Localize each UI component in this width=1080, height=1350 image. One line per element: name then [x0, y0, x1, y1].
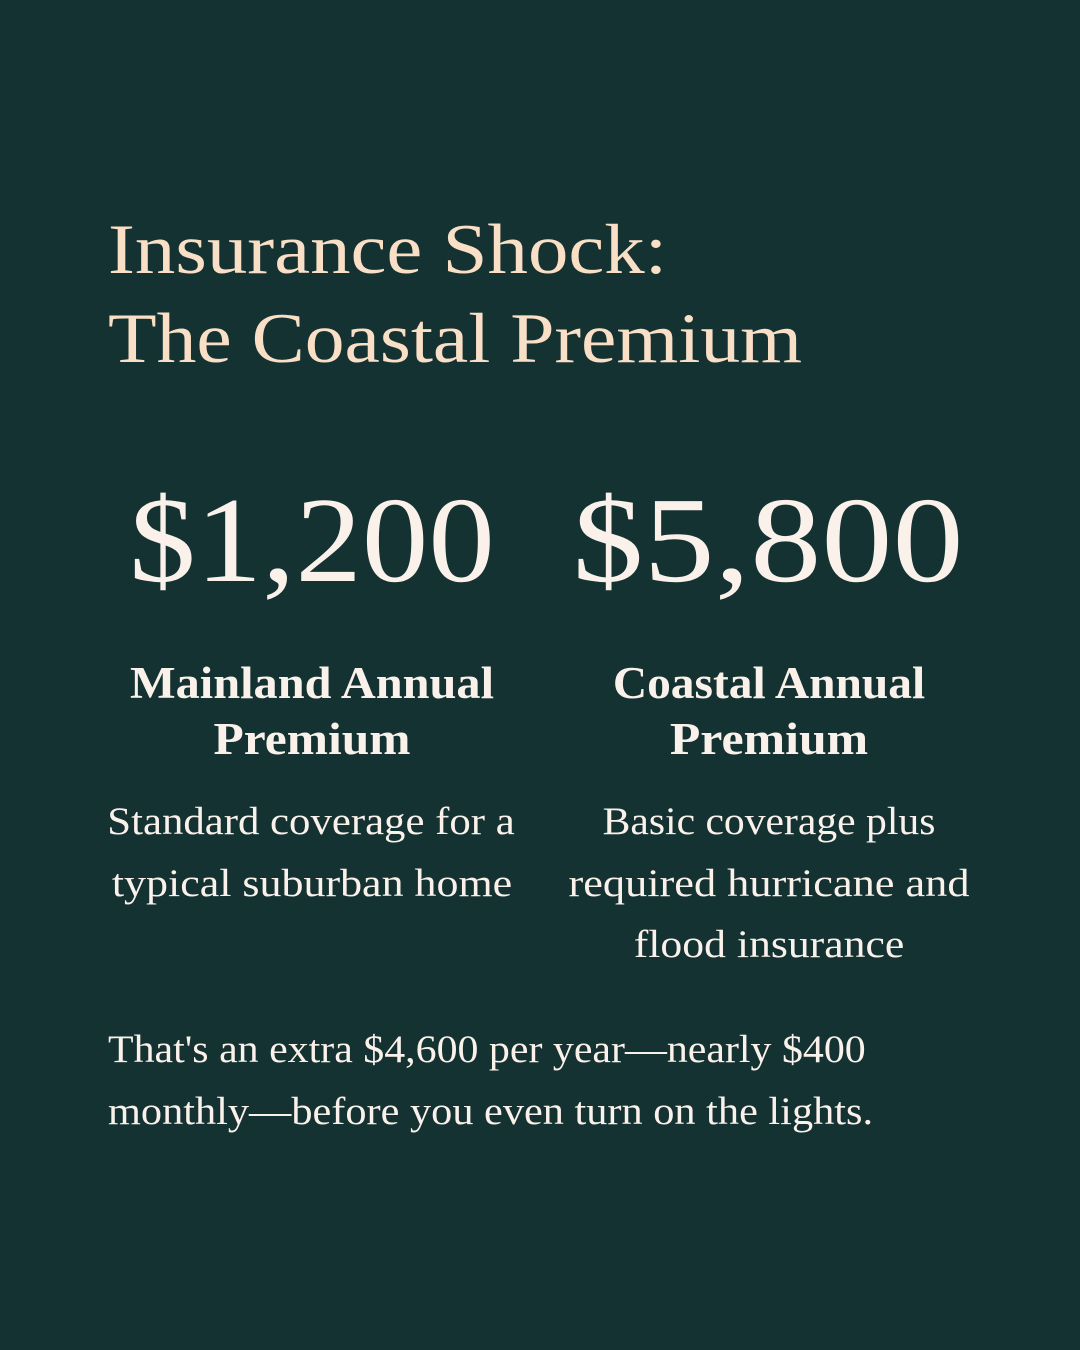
coastal amount: $5,800: [572, 473, 964, 608]
mainland heading: Mainland Annual: [130, 658, 494, 708]
coastal heading: Coastal Annual: [612, 658, 925, 708]
mainland description: [107, 800, 515, 904]
closing statement: [108, 1028, 873, 1132]
panel: coastal premium: [568, 473, 969, 966]
mainland heading: Premium: [213, 714, 411, 764]
coastal description: flood insurance: [633, 923, 904, 966]
coastal heading: Premium: [669, 714, 868, 764]
title: Insurance Shock:: [108, 211, 667, 289]
mainland amount: $1,200: [129, 473, 495, 608]
mainland description: typical suburban home: [111, 862, 512, 904]
coastal description: Basic coverage plus: [602, 800, 935, 843]
closing statement: That's an extra $4,600 per year—nearly $400: [108, 1028, 866, 1071]
coastal heading: [612, 658, 925, 764]
closing statement: monthly—before you even turn on the lights.: [108, 1090, 873, 1132]
mainland heading: [130, 658, 494, 764]
coastal description: required hurricane and: [568, 862, 969, 904]
coastal description: [568, 800, 969, 966]
mainland description: Standard coverage for a: [107, 800, 515, 843]
panel: mainland premium: [107, 473, 515, 904]
title: [108, 211, 802, 378]
title: The Coastal Premium: [108, 300, 802, 378]
